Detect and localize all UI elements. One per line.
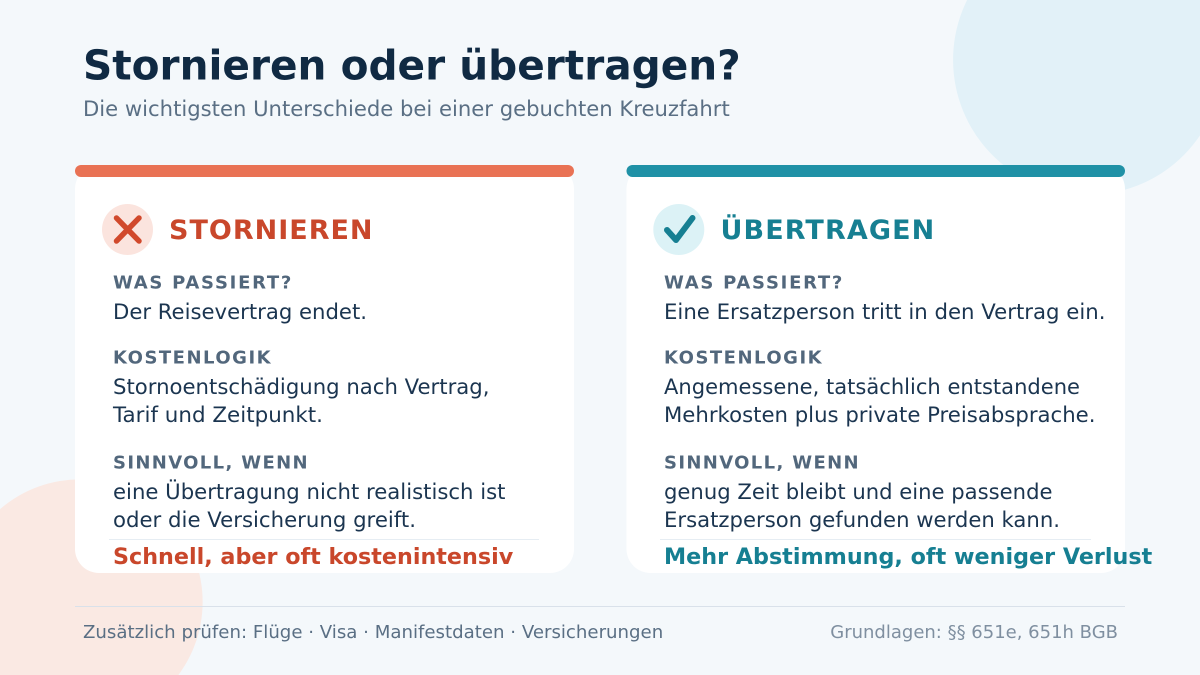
title: Stornieren oder übertragen? bbox=[83, 42, 741, 90]
section: kostenlogik: KOSTENLOGIK bbox=[664, 348, 823, 368]
section: was passiert: WAS PASSIERT? bbox=[664, 272, 844, 294]
panel: stornieren bbox=[75, 165, 574, 573]
subtitle: Die wichtigsten Unterschiede bei einer gebuchten Kreuzfahrt bbox=[83, 96, 730, 121]
section: sinnvoll wenn bbox=[113, 452, 506, 533]
verdict: Schnell, aber oft kostenintensiv bbox=[113, 544, 514, 570]
section: was passiert bbox=[664, 272, 1106, 325]
accent bar bbox=[75, 165, 574, 177]
icon: cross bbox=[102, 204, 153, 255]
section: was passiert: WAS PASSIERT? bbox=[113, 272, 293, 294]
section: sinnvoll wenn: oder die Versicherung greift. bbox=[113, 508, 416, 533]
decorative circle: top right bbox=[953, 0, 1200, 195]
section: kostenlogik: KOSTENLOGIK bbox=[113, 348, 272, 368]
section: was passiert bbox=[113, 272, 367, 325]
section: sinnvoll wenn: eine Übertragung nicht realistisch ist bbox=[113, 479, 506, 505]
section: kostenlogik: Mehrkosten plus private Preisabsprache. bbox=[664, 403, 1096, 428]
section: kostenlogik: Tarif und Zeitpunkt. bbox=[112, 403, 323, 428]
panel: übertragen bbox=[626, 165, 1153, 573]
decorative circle: bottom left bbox=[0, 479, 203, 675]
section: sinnvoll wenn bbox=[664, 452, 1060, 533]
accent bar bbox=[626, 165, 1125, 177]
footer: left note: Zusätzlich prüfen: Flüge · Visa · Manifestdaten · Versicherungen bbox=[83, 622, 663, 643]
section: sinnvoll wenn: Ersatzperson gefunden werden kann. bbox=[664, 508, 1060, 533]
section: kostenlogik: Angemessene, tatsächlich entstandene bbox=[664, 375, 1080, 400]
section: kostenlogik: Stornoentschädigung nach Vertrag, bbox=[113, 375, 490, 400]
card background bbox=[626, 165, 1125, 573]
card background bbox=[75, 165, 574, 573]
section: kostenlogik bbox=[112, 348, 490, 428]
heading: ÜBERTRAGEN bbox=[720, 213, 935, 246]
section: was passiert: Eine Ersatzperson tritt in den Vertrag ein. bbox=[664, 300, 1106, 325]
section: sinnvoll wenn: SINNVOLL, WENN bbox=[664, 452, 860, 474]
icon: check bbox=[653, 204, 704, 255]
section: sinnvoll wenn: genug Zeit bleibt und eine passende bbox=[664, 480, 1052, 505]
section: sinnvoll wenn: SINNVOLL, WENN bbox=[113, 452, 309, 474]
verdict: Mehr Abstimmung, oft weniger Verlust bbox=[664, 544, 1153, 570]
section: was passiert: Der Reisevertrag endet. bbox=[113, 300, 367, 325]
section: kostenlogik bbox=[664, 348, 1096, 428]
heading: STORNIEREN bbox=[169, 215, 374, 246]
footer: right note: Grundlagen: §§ 651e, 651h BGB bbox=[830, 622, 1118, 643]
